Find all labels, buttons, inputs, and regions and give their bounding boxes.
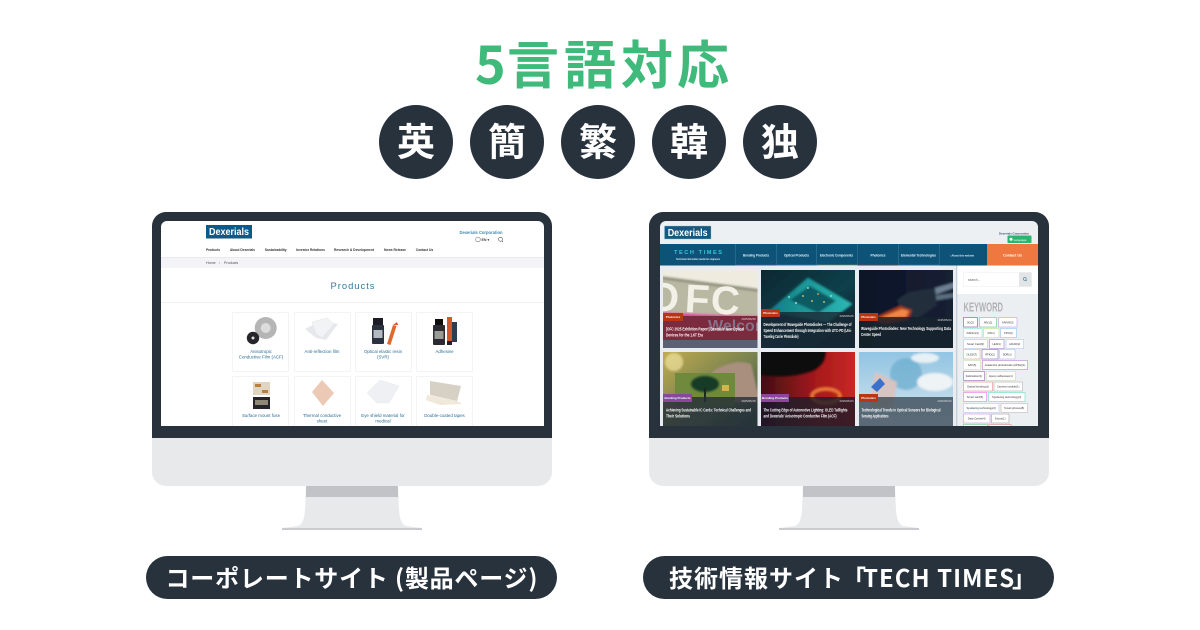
article card: OFC report: OFC bbox=[647, 275, 741, 324]
article card: OFC report: Welcom bbox=[708, 318, 769, 335]
keyword tags: AR(12) bbox=[984, 320, 992, 324]
badge: Simplified Chinese: 簡 bbox=[488, 112, 526, 166]
keyword tags: Drone(1) bbox=[995, 417, 1006, 421]
language badges bbox=[379, 105, 817, 179]
article card: fiber cable: Waveguide Photodiodes: New Technology Supporting Data bbox=[861, 326, 952, 331]
page heading: Products bbox=[330, 280, 376, 291]
article card: optical sensors bbox=[859, 352, 953, 426]
product card: adhesive: Adhesive bbox=[435, 349, 454, 354]
product card: double coated tapes: Double-coated tapes bbox=[424, 413, 466, 418]
article card: fiber cable: Photonics bbox=[861, 315, 876, 319]
article text: OFC report: 2025/06/30 bbox=[742, 317, 756, 321]
product card: surface mount fuse bbox=[232, 376, 289, 426]
article card: automotive lighting: The Cutting Edge of Automotive Lighting: OLED Taillights bbox=[764, 408, 848, 412]
article card: IC card: Achieving Sustainable IC Cards: Technical Challenges and bbox=[666, 408, 751, 412]
navigation: Contact Us bbox=[416, 247, 433, 252]
search box bbox=[964, 272, 1032, 286]
label: TECH TIMES site: 「 bbox=[842, 559, 867, 594]
badge: Korean bbox=[652, 105, 726, 179]
keyword tags: SAF(5) bbox=[968, 363, 976, 367]
article card: wavelength photodiodes bbox=[761, 270, 855, 348]
article card: wavelength photodiodes: Speed Enhancement through Integration with UTC-PD (Uni- bbox=[764, 328, 852, 333]
badge: German bbox=[743, 105, 817, 179]
article card: optical sensors: 2025/05/20 bbox=[938, 399, 952, 403]
product card: SVR: Optical elastic resin bbox=[364, 349, 403, 354]
label: corporate site: コーポレートサイト (製品ページ) bbox=[166, 559, 538, 594]
search box: search... bbox=[968, 278, 980, 282]
product card: ACF: Anisotropic bbox=[250, 349, 273, 354]
navigation bar: › About this website bbox=[950, 253, 974, 257]
navigation: Investor Relations bbox=[296, 247, 325, 252]
keyword tags: RFID(2) bbox=[985, 352, 995, 356]
article card: wavelength photodiodes: Photonics bbox=[763, 311, 778, 315]
product card: surface mount fuse: Surface mount fuse bbox=[242, 413, 281, 418]
article text: OFC report bbox=[663, 313, 756, 338]
keyword tags: Epoxy adhesives(1) bbox=[989, 374, 1013, 378]
product card: SVR: (SVR) bbox=[377, 354, 390, 359]
article card: IC card: Bonding Products bbox=[664, 396, 691, 400]
breadcrumb: › bbox=[219, 261, 221, 265]
keyword tags: Smart Card(3) bbox=[967, 342, 984, 346]
badge: Simplified Chinese bbox=[470, 105, 544, 179]
logo: Dexerials bbox=[209, 227, 249, 238]
article text: OFC report: [OFC 2025 Exhibition Report] Dexerials' New Optical bbox=[666, 326, 744, 332]
keyword tags: OLED(7) bbox=[966, 352, 977, 356]
navigation: Products bbox=[206, 247, 220, 252]
header right: Dexerials Corporation bbox=[460, 230, 503, 235]
article card: automotive lighting: and Dexerials' Anisotropic Conductive Film (ACF) bbox=[764, 414, 837, 418]
navigation bar: Optical Products bbox=[784, 252, 810, 257]
navigation bar bbox=[655, 244, 1044, 266]
article card: IC card: Their Solutions bbox=[666, 414, 691, 418]
badge: German: 独 bbox=[761, 112, 799, 166]
keyword tags bbox=[964, 318, 1028, 434]
keyword tags: SDR(1) bbox=[1003, 352, 1012, 356]
product card: anti-reflection film bbox=[294, 312, 350, 372]
article text: OFC report: Devices for the 1.6T Era bbox=[666, 332, 704, 338]
header: Dexerials bbox=[668, 228, 708, 239]
keyword tags: LiDAR(2) bbox=[1009, 342, 1020, 346]
monitor stand bbox=[282, 486, 422, 530]
keyword tags: Sputtering technology(4) bbox=[992, 395, 1021, 399]
article card: fiber cable: 2025/05/24 bbox=[938, 318, 952, 322]
badge: Korean: 韓 bbox=[670, 112, 708, 166]
article card: optical sensors: Technological Trends in Optical Sensors for Biological bbox=[862, 408, 940, 412]
article card: wavelength photodiodes: 2025/05/29 bbox=[840, 314, 854, 318]
sidebar bbox=[956, 266, 1038, 426]
navigation bar: Electronic Components bbox=[820, 252, 854, 257]
label: TECH TIMES site bbox=[643, 556, 1054, 599]
article card: optical sensors: Photonics bbox=[861, 396, 876, 400]
product card: thermal sheet: sheet bbox=[317, 418, 328, 423]
navigation bar: Elemental Technologies bbox=[901, 252, 937, 257]
keyword tags: Sputtering technology(2) bbox=[967, 406, 996, 410]
product card: thermal sheet bbox=[294, 376, 351, 426]
article card: automotive lighting: Bonding Products bbox=[762, 396, 788, 400]
product card: ACF bbox=[232, 312, 288, 372]
keyword heading: KEYWORD bbox=[964, 300, 1003, 314]
label: TECH TIMES site: TECH TIMES bbox=[863, 559, 1015, 594]
product card: adhesive bbox=[416, 312, 472, 372]
keyword tags: Data Center(4) bbox=[968, 417, 986, 421]
product card: anti-reflection film: Anti-reflection film bbox=[305, 349, 340, 354]
navigation: News Release bbox=[384, 247, 407, 252]
monitor: corporate site bbox=[152, 212, 552, 530]
product card: double coated tapes bbox=[416, 376, 473, 426]
navigation bbox=[206, 248, 434, 252]
breadcrumb: Home bbox=[206, 261, 216, 265]
article card: IC card: 2025/05/15 bbox=[742, 399, 756, 403]
screen: corporate products page bbox=[155, 215, 550, 436]
keyword tags: DAFilm(4) bbox=[967, 331, 979, 335]
keyword tags: AR/VR(3) bbox=[1002, 320, 1014, 324]
product card: eye shield bbox=[355, 376, 412, 426]
breadcrumb bbox=[161, 257, 544, 268]
badge: English bbox=[379, 105, 453, 179]
badge: English: 英 bbox=[397, 112, 435, 166]
article card: wavelength photodiodes: Traveling Carrier Photodiode) bbox=[764, 334, 799, 339]
navigation bar: Contact Us bbox=[1003, 254, 1022, 258]
monitor body bbox=[152, 212, 552, 486]
header right: EN ▾ bbox=[482, 238, 490, 242]
article card: OFC report bbox=[663, 270, 758, 348]
navigation bar: TECH TIMES bbox=[674, 250, 722, 256]
article card: wavelength photodiodes: Development of Waveguide Photodiodes — The Challenge of bbox=[764, 322, 852, 327]
product card: SVR bbox=[356, 312, 412, 372]
product card: ACF: Conductive Film (ACF) bbox=[239, 354, 284, 359]
header right bbox=[460, 230, 503, 242]
navigation: Sustainability bbox=[265, 247, 287, 252]
keyword tags: DX(1) bbox=[988, 331, 995, 335]
article card: automotive lighting bbox=[761, 352, 855, 426]
keyword tags: Optical bonding(1) bbox=[967, 385, 989, 389]
keyword tags: 5G(2) bbox=[967, 320, 974, 324]
article card: optical sensors: Sensing Applications bbox=[862, 414, 889, 418]
header bbox=[664, 226, 1032, 243]
navigation: Research & Development bbox=[334, 247, 375, 252]
article text: OFC report: Photonics bbox=[666, 315, 681, 319]
product card: eye shield: Eye shield material for bbox=[361, 413, 405, 418]
article card: fiber cable bbox=[859, 270, 953, 348]
keyword tags: Camera module(1) bbox=[997, 385, 1020, 389]
product card: eye shield: medical bbox=[375, 418, 391, 423]
monitor stand bbox=[779, 486, 919, 530]
header: Dexerials Corporation bbox=[999, 232, 1029, 236]
header: Language bbox=[1014, 238, 1027, 242]
monitor: TECH TIMES site bbox=[647, 212, 1049, 530]
monitor body bbox=[649, 212, 1049, 486]
navigation: About Dexerials bbox=[230, 247, 255, 252]
keyword tags: Avalanche photodiodes (APDs)(1) bbox=[985, 363, 1025, 367]
badge: Traditional Chinese bbox=[561, 105, 635, 179]
title: 5言語対応 bbox=[475, 24, 729, 99]
navigation bar: Photonics bbox=[870, 252, 886, 257]
keyword tags: FPC(6) bbox=[1004, 331, 1013, 335]
navigation bar: Technical information media for engineers bbox=[676, 258, 721, 261]
keyword tags: Fabrication(1) bbox=[966, 374, 982, 378]
navigation bar: Bonding Products bbox=[743, 252, 770, 257]
screen: TECH TIMES page bbox=[660, 221, 1038, 426]
article card: IC card bbox=[663, 352, 758, 426]
keyword tags: LED(1) bbox=[992, 342, 1001, 346]
badge: Traditional Chinese: 繁 bbox=[579, 112, 617, 166]
keyword tags: Smart phones(8) bbox=[1004, 406, 1024, 410]
keyword tags: Smart card(6) bbox=[967, 395, 983, 399]
label: TECH TIMES site: 」 bbox=[1012, 559, 1037, 594]
article card: automotive lighting: 2025/05/24 bbox=[840, 399, 854, 403]
article card: fiber cable: Center Speed bbox=[861, 332, 881, 337]
label: TECH TIMES site: 技術情報サイト bbox=[669, 559, 844, 594]
breadcrumb: Products bbox=[224, 261, 238, 265]
product card: thermal sheet: Thermal conductive bbox=[303, 413, 342, 418]
